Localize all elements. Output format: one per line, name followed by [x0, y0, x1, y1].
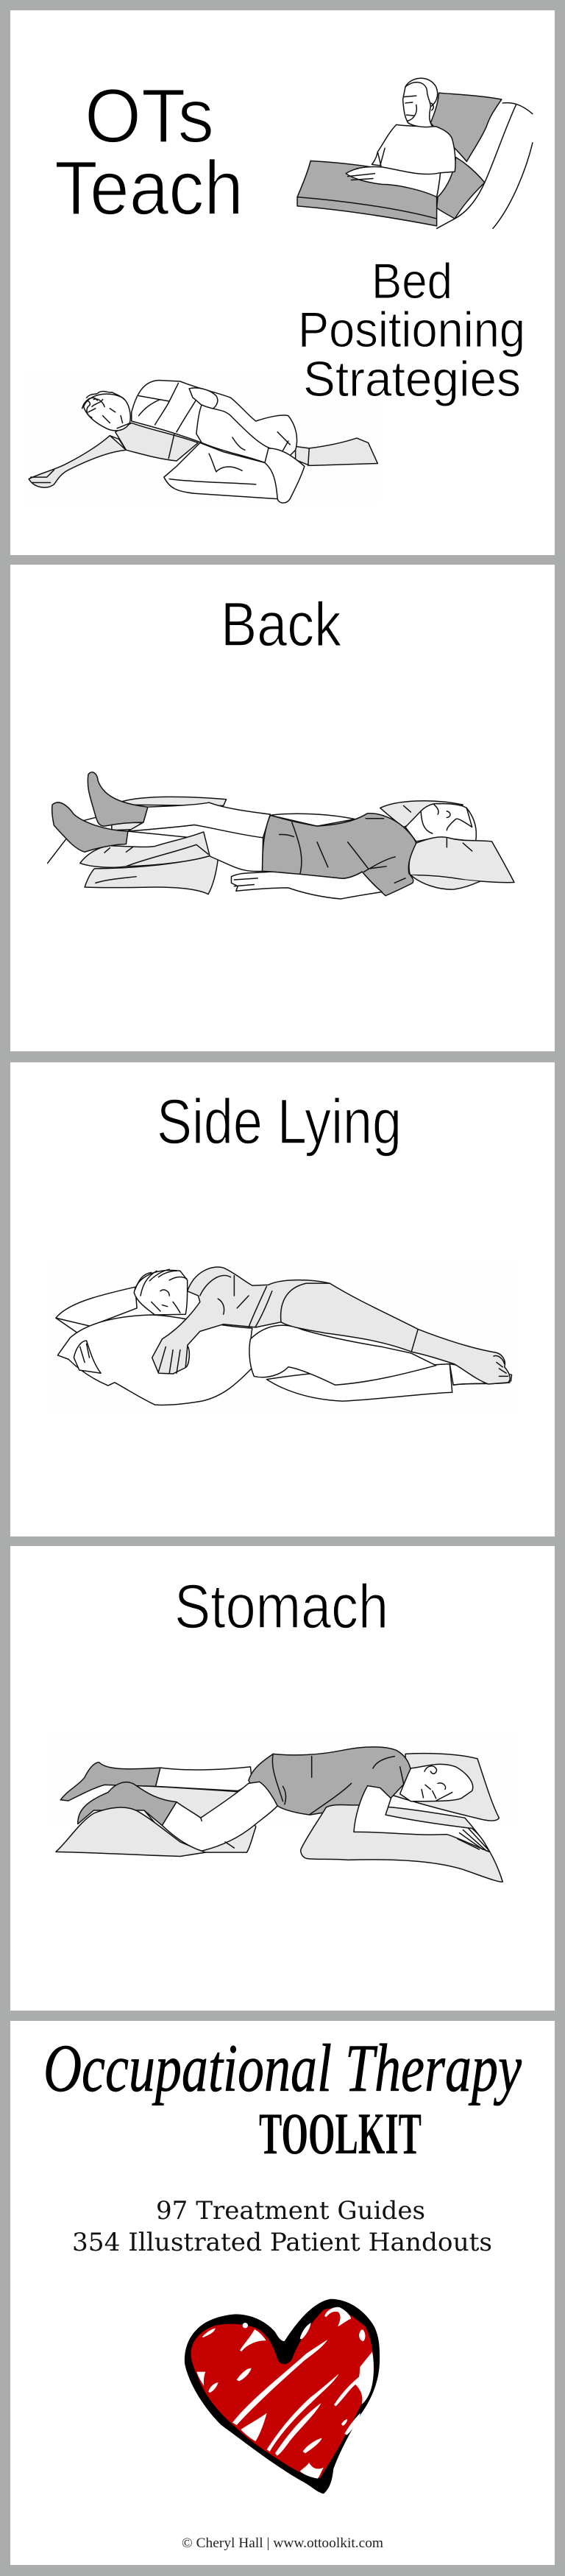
illustration: woman lying on side with leg over pillow: [29, 381, 377, 503]
logo: Occupational Therapy Toolkit: [43, 2030, 522, 2167]
panel: stomach: [10, 1546, 555, 2011]
text: copyright: © Cheryl Hall | www.ottoolkit.com: [182, 2536, 383, 2551]
text: product counts: 97 Treatment Guides: [156, 2196, 425, 2226]
illustration: lying on side with pillows: [56, 1267, 512, 1405]
panel: side lying: [10, 1062, 555, 1536]
heading: Bed Positioning Strategies: Strategies: [303, 351, 521, 407]
heading: OTs Teach: [54, 74, 244, 231]
heading: Back: Back: [221, 590, 342, 659]
heading: Stomach: Stomach: [174, 1572, 388, 1641]
logo: Occupational Therapy Toolkit: TOOLKIT: [259, 2102, 422, 2167]
icon: scribbled red heart: [185, 2299, 380, 2494]
heading: Side Lying: Side Lying: [157, 1087, 402, 1157]
illustration: man sitting up in bed with pillows: [297, 78, 533, 228]
panel: occupational therapy toolkit: [10, 2021, 555, 2565]
heading: OTs Teach: Teach: [54, 146, 244, 231]
heading: Bed Positioning Strategies: [298, 253, 525, 407]
text: product counts: 354 Illustrated Patient Handouts: [72, 2228, 492, 2257]
illustration: lying on back with pillows under head and legs: [48, 772, 514, 899]
heading: Bed Positioning Strategies: Positioning: [298, 302, 525, 358]
heading: Bed Positioning Strategies: Bed: [372, 253, 452, 309]
panel: back: [10, 565, 555, 1051]
text: product counts: [72, 2196, 492, 2257]
panel: title: [10, 10, 555, 555]
heading: OTs Teach: OTs: [85, 74, 214, 159]
illustration: lying on stomach with pillows: [56, 1747, 502, 1882]
